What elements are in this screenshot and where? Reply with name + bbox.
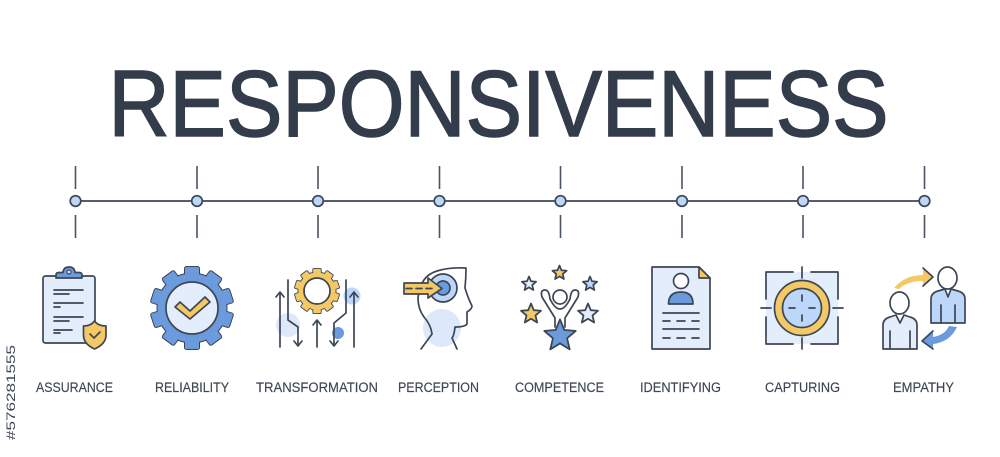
icon: empathy two people with arrows bbox=[883, 267, 965, 349]
stock image id: #576281555 bbox=[4, 345, 18, 440]
icon: head perception bbox=[404, 268, 472, 349]
labels bbox=[36, 380, 954, 395]
labels: EMPATHY bbox=[893, 380, 954, 395]
labels: CAPTURING bbox=[765, 380, 840, 395]
labels: RELIABILITY bbox=[155, 380, 229, 395]
icon: clipboard with shield bbox=[43, 267, 106, 349]
labels: COMPETENCE bbox=[515, 380, 604, 395]
labels: IDENTIFYING bbox=[640, 380, 721, 395]
icon: transformation gear and arrows bbox=[276, 269, 360, 347]
labels: PERCEPTION bbox=[398, 380, 479, 395]
icon: gear with check bbox=[151, 267, 233, 349]
timeline bbox=[70, 166, 930, 238]
labels: TRANSFORMATION bbox=[256, 380, 378, 395]
icon: resume document bbox=[652, 267, 710, 349]
title: RESPONSIVENESS bbox=[108, 51, 888, 156]
icon: person with stars bbox=[521, 266, 598, 349]
labels: ASSURANCE bbox=[36, 380, 113, 395]
icon: capture target bbox=[761, 267, 843, 349]
